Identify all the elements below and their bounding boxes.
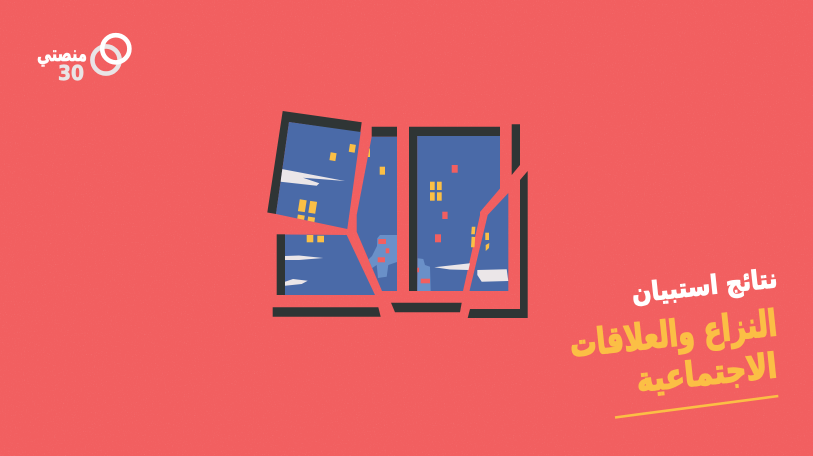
upper middle pane <box>357 127 397 291</box>
subtitle: نتائج استبيان <box>630 264 779 309</box>
bottom frame bars <box>273 303 520 318</box>
illustration: shattered window <box>267 111 528 318</box>
logo number: 30 <box>58 61 84 85</box>
lower left pane <box>277 234 375 295</box>
underline <box>615 396 778 418</box>
text block: titles <box>568 264 779 418</box>
tilted upper left pane <box>267 111 362 229</box>
logo <box>37 35 129 85</box>
main right pane <box>417 136 500 291</box>
logo name: منصتي <box>37 42 87 67</box>
lower right shard <box>470 193 508 291</box>
logo icon: overlapping circles <box>92 35 129 74</box>
main title line 2: الاجتماعية <box>635 346 779 401</box>
right frame <box>409 124 528 318</box>
